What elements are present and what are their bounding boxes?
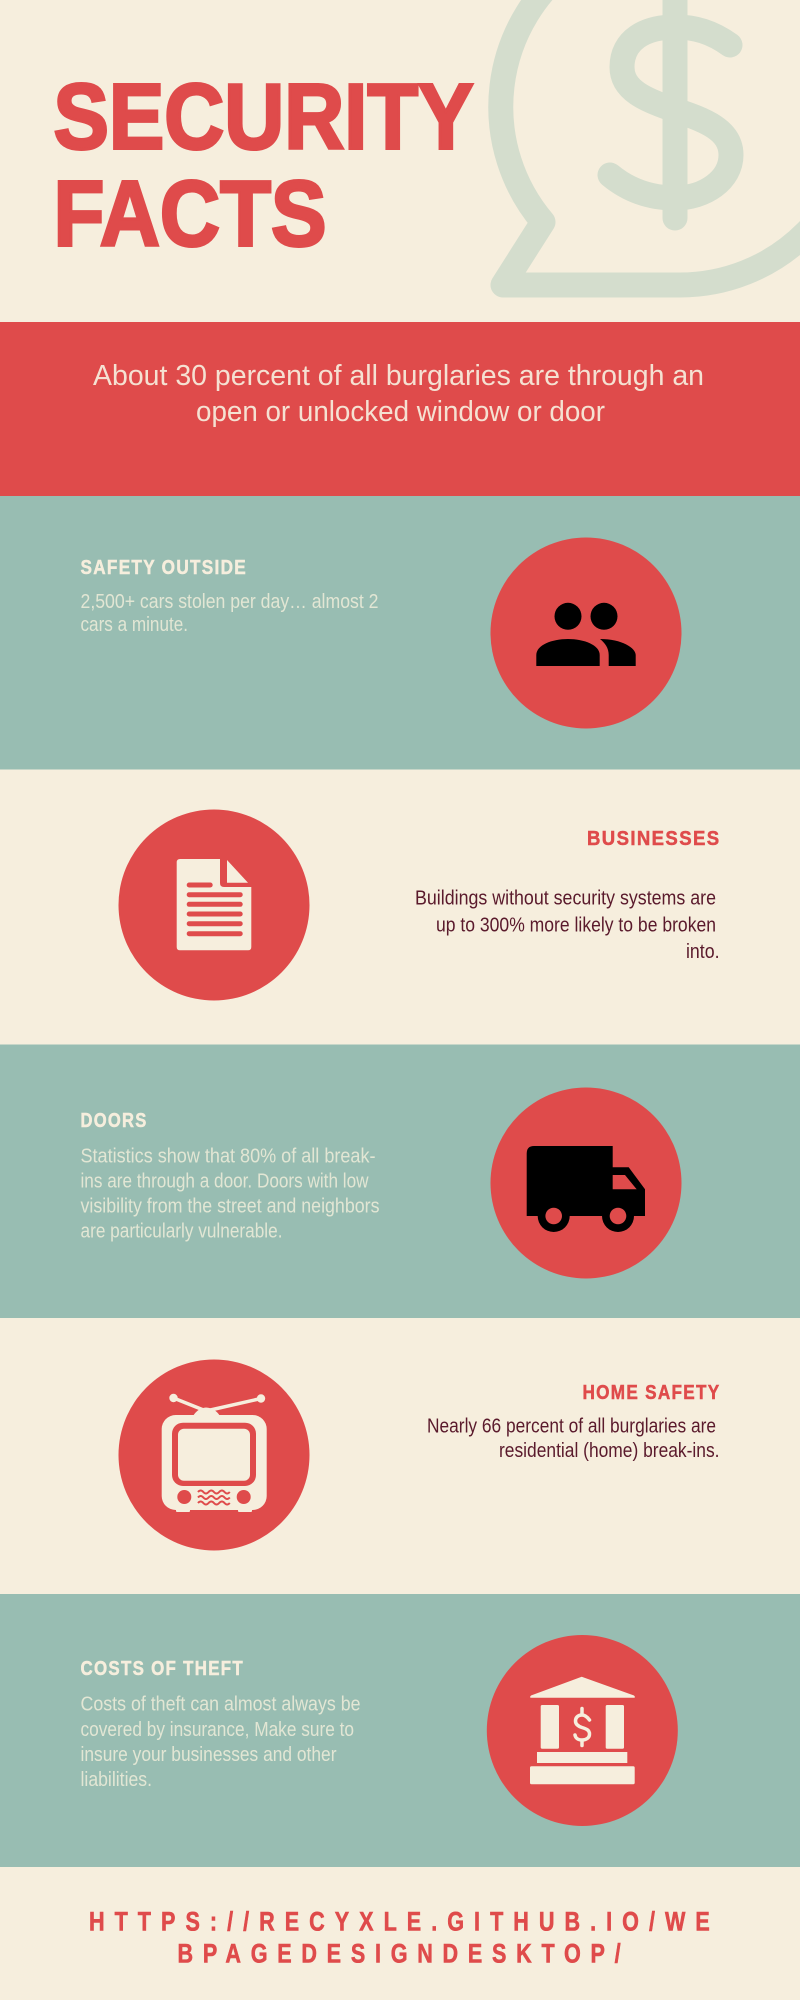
body: safety outside: cars a minute. [80,614,188,636]
icon: people in red circle [490,538,682,728]
body: home safety [427,1416,720,1462]
icon: truck in red circle [490,1088,682,1278]
body: home safety: residential (home) break-ins. [499,1440,720,1462]
body: costs of theft: insure your businesses and other [80,1744,337,1766]
icon: television in red circle [118,1360,310,1550]
footer url: HTTPS://RECYXLE.GITHUB.IO/WE [89,1908,710,1937]
icon: speech bubble with dollar sign watermark [501,0,800,285]
body: doors [80,1146,380,1242]
panel: safety outside [0,496,800,770]
heading: safety outside: SAFETY OUTSIDE [80,557,247,579]
body: costs of theft [80,1694,360,1791]
heading: costs of theft: COSTS OF THEFT [80,1658,244,1680]
panel: costs of theft [0,1594,800,1867]
icon: document in red circle [118,810,310,1000]
intro text: About 30 percent of all burglaries are through an [93,360,704,392]
intro text [93,360,704,428]
body: costs of theft: covered by insurance, Make sure to [80,1719,354,1741]
heading: doors: DOORS [80,1110,148,1132]
icon: bank in red circle [487,1635,678,1826]
title: FACTS [54,162,326,266]
heading: businesses: BUSINESSES [587,828,720,850]
panel: footer [0,1867,800,2000]
body: doors: are particularly vulnerable. [80,1220,282,1242]
body: businesses [415,888,720,963]
title: SECURITY [54,64,474,168]
body: safety outside [80,591,378,636]
body: costs of theft: liabilities. [80,1769,152,1791]
body: safety outside: 2,500+ cars stolen per day… almost 2 [80,591,378,613]
intro text: open or unlocked window or door [196,396,605,428]
panel: header [0,0,800,322]
panel: intro banner [0,322,800,496]
heading: home safety: HOME SAFETY [582,1382,720,1404]
body: costs of theft: Costs of theft can almost always be [80,1694,360,1716]
body: doors: ins are through a door. Doors with low [80,1170,369,1192]
panel: businesses [0,770,800,1044]
footer url [89,1908,710,1969]
panel: home safety [0,1318,800,1594]
body: businesses: up to 300% more likely to be broken [436,914,716,936]
title [54,64,474,266]
body: businesses: Buildings without security systems are [415,888,716,910]
body: businesses: into. [686,941,720,963]
body: doors: Statistics show that 80% of all break- [80,1146,376,1168]
body: doors: visibility from the street and neighbors [80,1196,380,1218]
panel: doors [0,1044,800,1318]
footer url: BPAGEDESIGNDESKTOP/ [178,1940,621,1969]
body: home safety: Nearly 66 percent of all burglaries are [427,1416,716,1438]
